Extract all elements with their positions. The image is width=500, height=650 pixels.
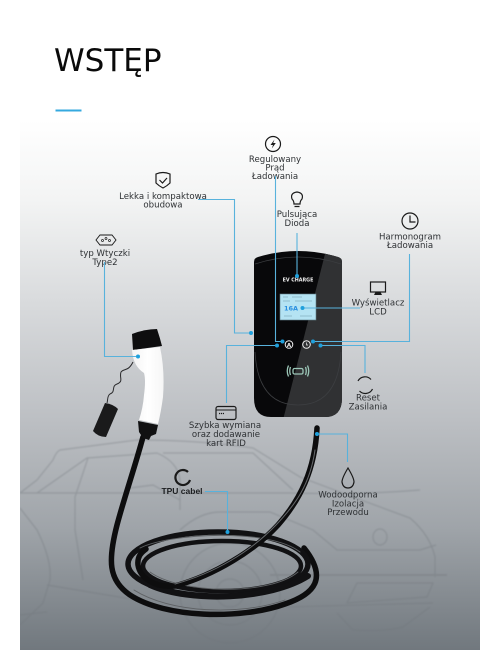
charger trim curves <box>255 257 341 405</box>
brand label: EV CHARGE <box>283 278 313 284</box>
icon: clock <box>402 213 418 229</box>
callout: LCD display: Wyświetlacz <box>352 298 405 308</box>
strain relief <box>138 421 158 440</box>
RFID symbol <box>287 366 309 376</box>
charger cable <box>138 428 317 586</box>
charger glossy panel <box>283 250 345 420</box>
cap tether <box>107 362 133 403</box>
callout: RFID cards: oraz dodawanie <box>192 430 260 440</box>
callout: plug type: Type2 <box>91 258 118 268</box>
button clock <box>303 341 310 348</box>
icon: card <box>216 406 236 420</box>
charging cable and coil <box>111 428 317 614</box>
icon: shield check <box>156 172 170 188</box>
callout: waterproof: Wodoodporna <box>318 490 378 500</box>
charger cable highlight <box>175 450 315 584</box>
callout: adjustable current: Ładowania <box>251 172 298 182</box>
icon: light bulb <box>292 192 302 206</box>
charger body <box>254 251 342 417</box>
icon: refresh arrows <box>358 377 372 393</box>
callout: adjustable current <box>249 136 301 344</box>
plug cap <box>93 403 118 437</box>
icon: bolt in circle <box>266 136 280 152</box>
callout: TPU cable <box>161 470 230 534</box>
button A: A <box>287 343 292 349</box>
callout: pulsing diode: Pulsująca <box>277 210 317 220</box>
callout: reset: Reset <box>356 394 381 404</box>
callout: waterproof: Izolacja <box>332 500 364 510</box>
title accent line <box>56 110 82 112</box>
callout: plug type <box>80 235 140 358</box>
coil loops <box>128 532 308 597</box>
callout: light housing: obudowa <box>143 200 183 210</box>
callout: adjustable current: Regulowany <box>249 155 301 165</box>
type 2 plug <box>93 329 164 440</box>
callout: light housing <box>119 172 253 335</box>
callout: TPU cable: TPU cabel <box>161 486 203 496</box>
callout: plug type: typ Wtyczki <box>80 249 130 259</box>
callout: waterproof <box>315 432 378 518</box>
callout: RFID cards <box>189 344 279 449</box>
title: WSTĘP <box>54 43 162 79</box>
callout: adjustable current: Prąd <box>265 164 285 174</box>
callout: reset <box>318 344 387 412</box>
callout: LCD display: LCD <box>369 308 387 318</box>
callout: schedule <box>311 213 441 344</box>
callout: schedule: Harmonogram <box>379 232 441 242</box>
plug head <box>132 329 162 350</box>
callout: waterproof: Przewodu <box>327 508 369 518</box>
LCD screen: 16A <box>284 304 298 312</box>
callout: LCD display <box>300 282 405 318</box>
icon: plug outline <box>96 235 116 245</box>
callout: pulsing diode: Dioda <box>285 219 309 229</box>
plug white handle <box>132 347 164 424</box>
background panel <box>20 120 480 650</box>
LCD screen <box>280 294 316 320</box>
callout: RFID cards: kart RFID <box>206 439 246 449</box>
wall charger <box>254 250 345 420</box>
button A <box>285 341 293 349</box>
callout: pulsing diode <box>277 192 317 278</box>
cable highlights <box>134 535 300 610</box>
car sketch background <box>20 439 446 586</box>
callout: reset: Zasilania <box>349 402 387 412</box>
icon: water drop <box>342 468 354 488</box>
callout: schedule: Ładowania <box>386 241 433 251</box>
icon: monitor <box>370 282 386 295</box>
icon: cable ring <box>175 470 190 485</box>
callout: light housing: Lekka i kompaktowa <box>119 192 207 202</box>
callout: RFID cards: Szybka wymiana <box>189 421 261 431</box>
plug cable with lower loop <box>111 437 316 614</box>
